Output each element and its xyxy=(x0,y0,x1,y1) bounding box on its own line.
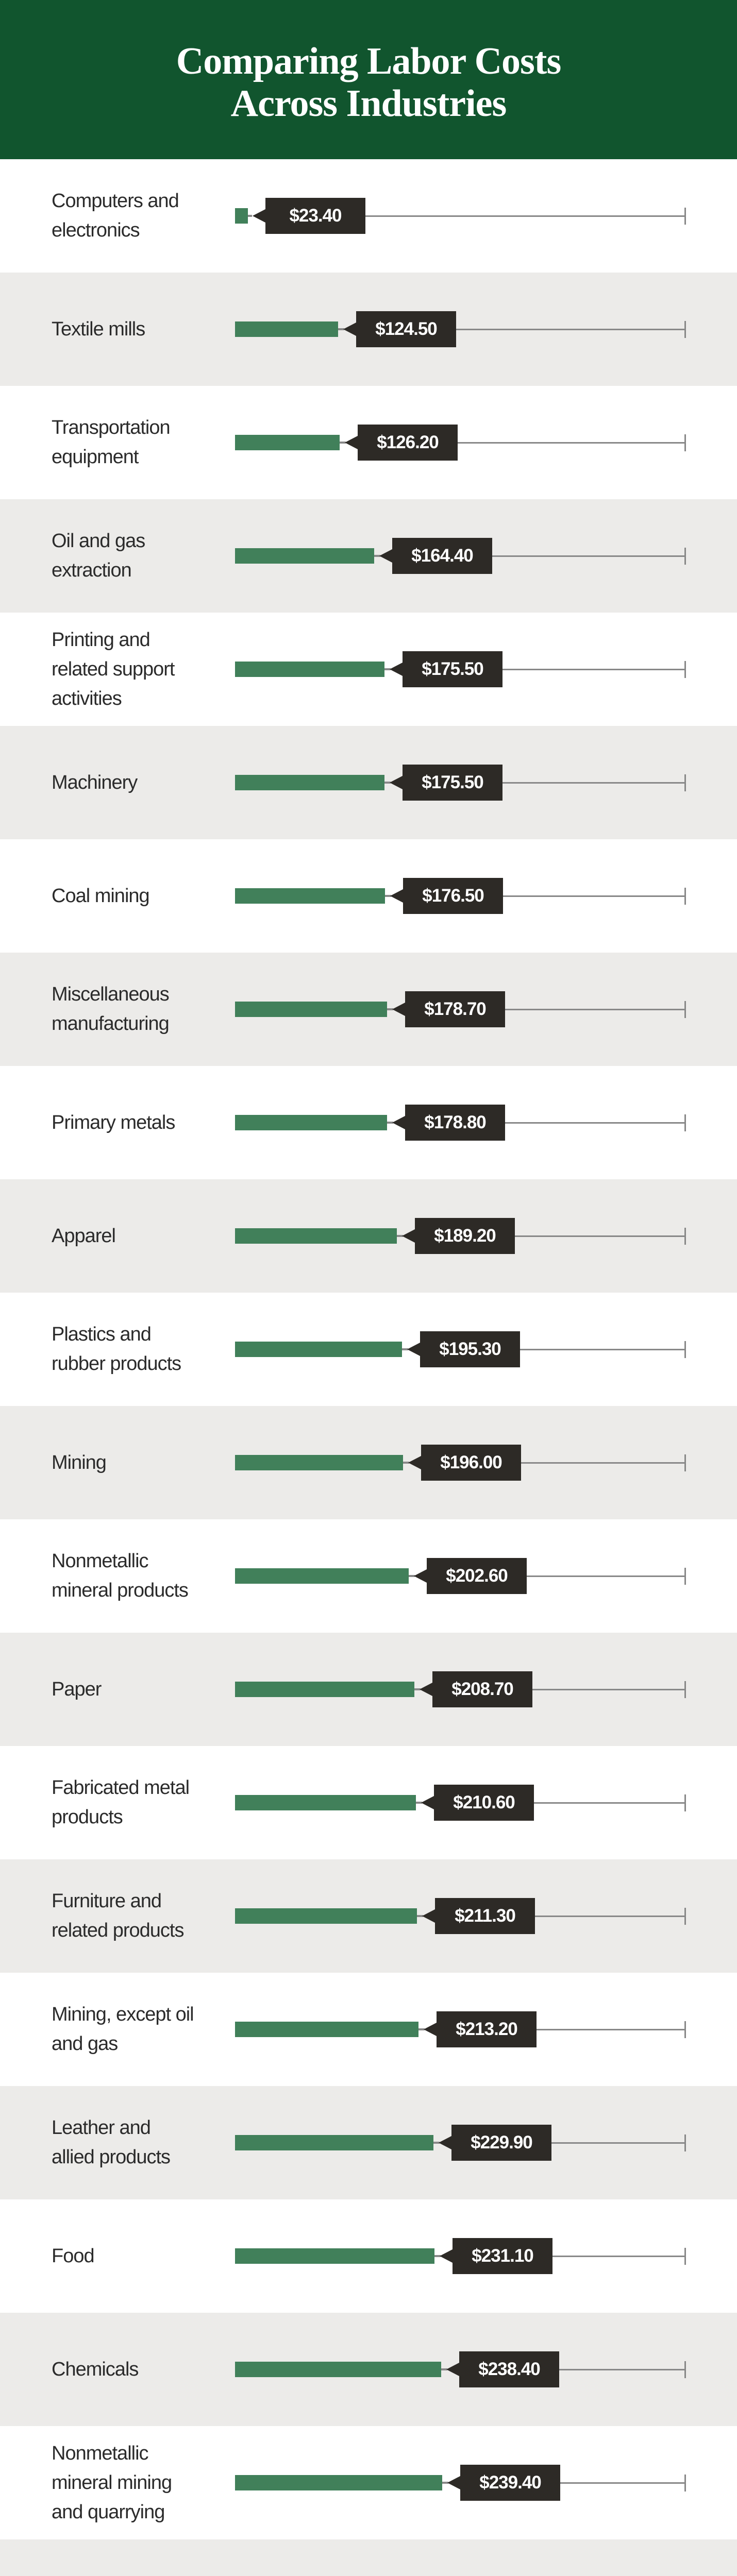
row: Furniture: related products xyxy=(52,1920,183,1941)
title: Across Industries xyxy=(231,82,506,125)
row: Oil and gas extraction xyxy=(0,499,737,613)
row: Nonmetallic mineral mining xyxy=(52,2442,686,2522)
row: Machinery: $175.50 xyxy=(422,772,483,792)
row: Nonmetallic mineral products xyxy=(52,1550,686,1601)
row: Mining except oil and gas: Mining, except oil xyxy=(52,2004,194,2025)
row: Leather: $229.90 xyxy=(471,2132,532,2153)
row: Food: $231.10 xyxy=(472,2246,533,2266)
row: Furniture: $211.30 xyxy=(455,1906,515,1926)
row: Plastics: Plastics and xyxy=(52,1324,151,1345)
row: Wood products xyxy=(0,2539,737,2576)
row: Transportation equipment: equipment xyxy=(52,446,138,468)
row: Mining xyxy=(0,1406,737,1519)
title xyxy=(0,0,737,159)
row: Miscellaneous manufacturing: manufacturing xyxy=(52,1013,169,1035)
row: Fabricated metal xyxy=(52,1777,686,1828)
row: Chemicals xyxy=(0,2313,737,2426)
row: Miscellaneous manufacturing: Miscellaneous xyxy=(52,984,169,1005)
row: Coal mining: Coal mining xyxy=(52,885,149,907)
row: Transportation equipment: $126.20 xyxy=(377,432,439,452)
row: Nonmetallic mineral mining: Nonmetallic xyxy=(52,2442,148,2464)
row: Textile mills: Textile mills xyxy=(52,318,145,340)
row: Leather xyxy=(0,2086,737,2199)
row: Nonmetallic mineral products: mineral products xyxy=(52,1580,188,1601)
row: Plastics: $195.30 xyxy=(439,1339,501,1359)
row: Nonmetallic mineral mining: and quarrying xyxy=(52,2501,164,2522)
row: Nonmetallic mineral mining: mineral mining xyxy=(52,2472,172,2494)
row: Primary metals: $178.80 xyxy=(424,1112,486,1132)
row: Printing: $175.50 xyxy=(422,659,483,679)
row: Apparel xyxy=(0,1179,737,1293)
row: Mining except oil and gas: and gas xyxy=(52,2033,118,2055)
row: Computers and electronics: electronics xyxy=(52,219,140,241)
row: Paper: Paper xyxy=(52,1679,101,1700)
row: Coal mining xyxy=(52,878,686,914)
row: Printing: activities xyxy=(52,687,122,709)
row: Primary metals: Primary metals xyxy=(52,1112,175,1133)
title: Comparing Labor Costs xyxy=(176,40,561,82)
row: Fabricated metal: Fabricated metal xyxy=(52,1777,189,1799)
row: Paper: $208.70 xyxy=(451,1679,513,1699)
row: Leather: allied products xyxy=(52,2146,170,2168)
row: Nonmetallic mineral products: Nonmetallic xyxy=(52,1550,148,1572)
row: Printing xyxy=(52,629,686,709)
row: Nonmetallic mineral products: $202.60 xyxy=(446,1566,508,1586)
row: Textile mills xyxy=(0,273,737,386)
row: Mining: $196.00 xyxy=(440,1452,502,1472)
row: Paper xyxy=(0,1633,737,1746)
row: Apparel: $189.20 xyxy=(434,1226,496,1246)
row: Mining: Mining xyxy=(52,1452,106,1473)
row: Primary metals xyxy=(52,1105,686,1141)
row: Coal mining: $176.50 xyxy=(422,886,484,906)
row: Computers and electronics: $23.40 xyxy=(289,206,342,226)
row: Oil and gas extraction: Oil and gas xyxy=(52,530,145,552)
row: Furniture: Furniture and xyxy=(52,1890,161,1912)
row: Printing: related support xyxy=(52,658,174,680)
row: Computers and electronics xyxy=(52,190,686,241)
row: Mining except oil and gas: $213.20 xyxy=(456,2019,517,2039)
row: Apparel: Apparel xyxy=(52,1225,115,1247)
row: Food xyxy=(52,2238,686,2274)
row: Mining except oil and gas xyxy=(52,2004,686,2055)
row: Plastics xyxy=(52,1324,686,1375)
row: Oil and gas extraction: $164.40 xyxy=(411,546,473,566)
row: Transportation equipment: Transportation xyxy=(52,417,170,438)
row: Textile mills: $124.50 xyxy=(375,319,437,339)
row: Food: Food xyxy=(52,2245,94,2267)
row: Computers and electronics: Computers and xyxy=(52,190,179,212)
row: Miscellaneous manufacturing: $178.70 xyxy=(424,999,486,1019)
row: Oil and gas extraction: extraction xyxy=(52,560,131,581)
row: Machinery: Machinery xyxy=(52,772,137,793)
row: Plastics: rubber products xyxy=(52,1353,181,1375)
row: Furniture xyxy=(0,1859,737,1973)
row: Transportation equipment xyxy=(52,417,686,468)
row: Machinery xyxy=(0,726,737,839)
row: Printing: Printing and xyxy=(52,629,150,650)
row: Fabricated metal: products xyxy=(52,1806,123,1828)
row: Miscellaneous manufacturing xyxy=(0,953,737,1066)
row: Chemicals: $238.40 xyxy=(478,2359,540,2379)
row: Leather: Leather and xyxy=(52,2117,150,2139)
row: Fabricated metal: $210.60 xyxy=(453,1792,515,1812)
row: Chemicals: Chemicals xyxy=(52,2359,138,2380)
row: Nonmetallic mineral mining: $239.40 xyxy=(479,2472,541,2493)
